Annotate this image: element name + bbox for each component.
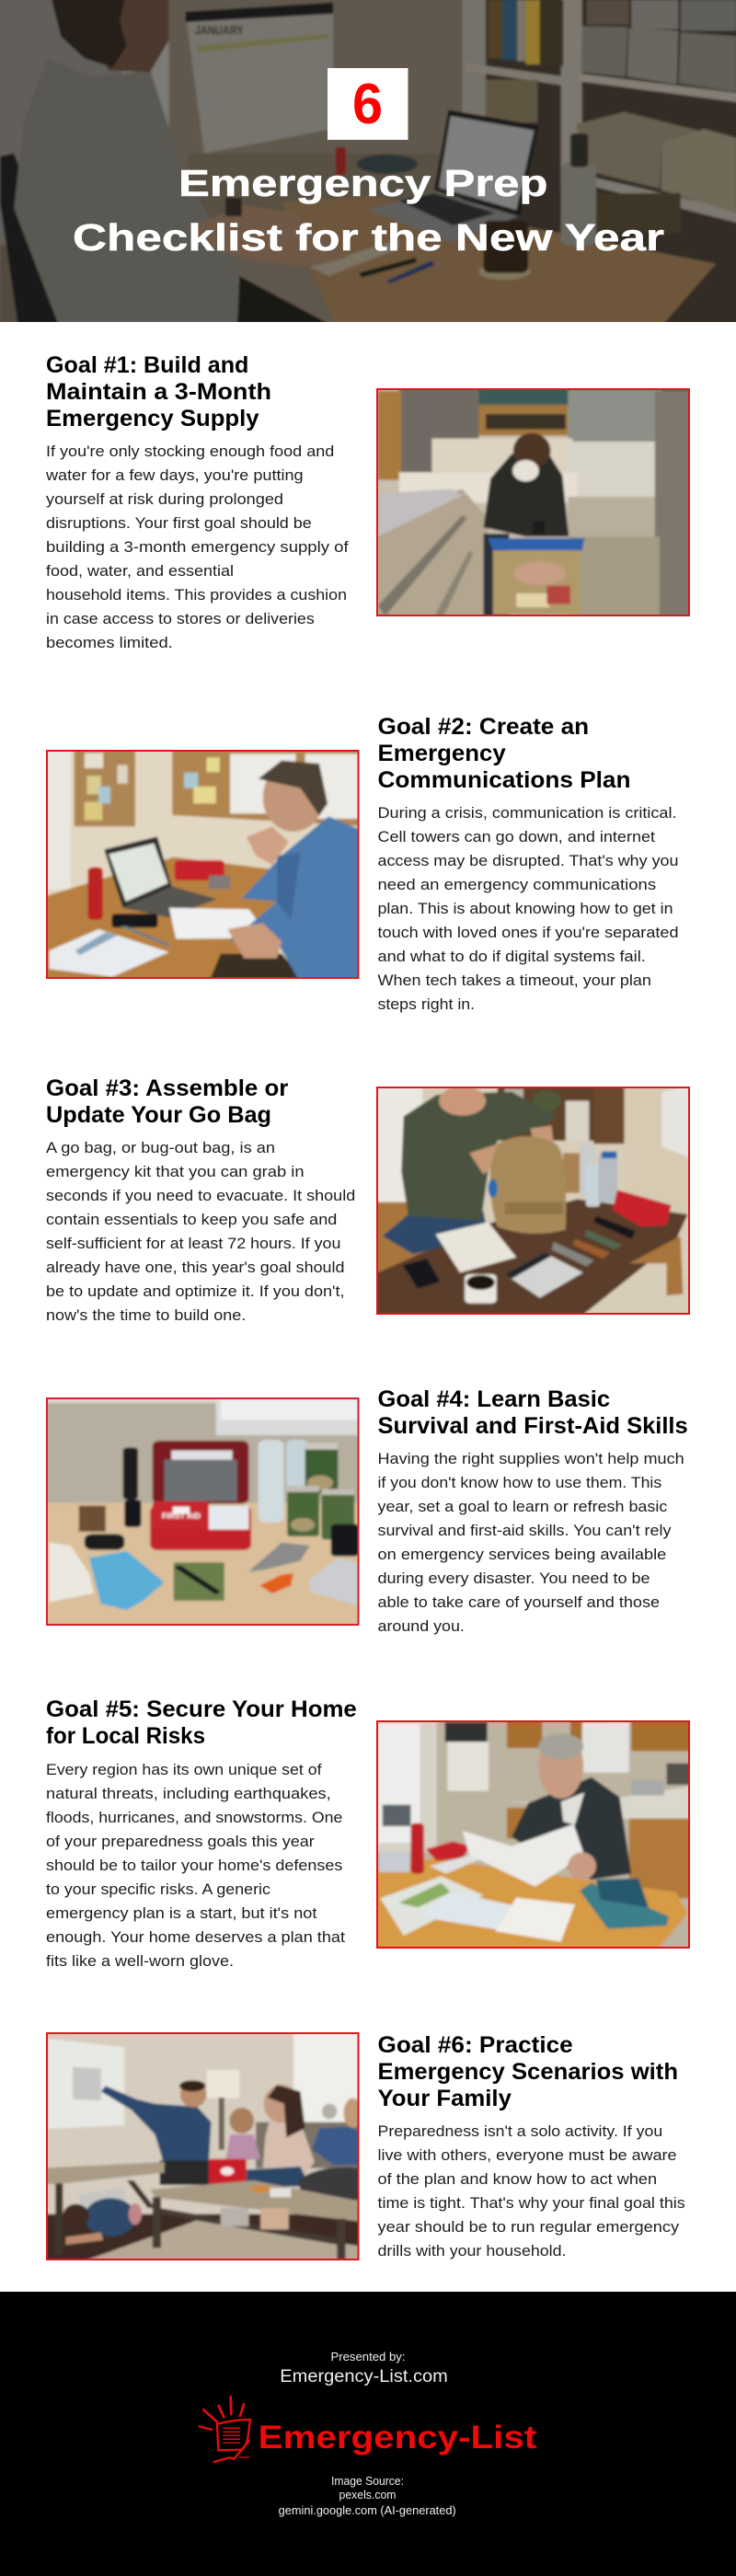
man <box>101 2086 212 2165</box>
backpack <box>490 1136 566 1234</box>
heading: goal 2: Emergency <box>377 741 506 766</box>
body text: goal 5: Every region has its own unique set of <box>46 1761 322 1778</box>
body text: goal 2: steps right in. <box>377 995 475 1013</box>
title: Emergency Prep <box>178 162 548 204</box>
body text: goal 3: A go bag, or bug-out bag, is an <box>46 1139 275 1156</box>
body text: goal 5: to your specific risks. A generic <box>46 1880 270 1898</box>
body text: goal 2 <box>377 804 679 1013</box>
body text: goal 6: Preparedness isn't a solo activity. If you <box>377 2122 662 2140</box>
panel: goal 6 <box>33 2024 685 2270</box>
title: Checklist for the New Year <box>73 216 664 259</box>
man <box>0 153 59 322</box>
heading: goal 1: Maintain a 3-Month <box>46 379 271 405</box>
heading: goal 5: for Local Risks <box>46 1723 205 1749</box>
number badge: 6 <box>352 73 383 136</box>
body text: goal 6: of the plan and know how to act when <box>377 2170 657 2188</box>
body text: goal 3: contain essentials to keep you safe and <box>46 1211 337 1228</box>
heading: goal 2: Communications Plan <box>377 767 631 793</box>
ration cans <box>305 1443 338 1493</box>
logo: Emergency-List <box>200 2397 537 2462</box>
body text: goal 6: drills with your household. <box>377 2242 567 2260</box>
flashlight and kit <box>410 1823 424 1874</box>
body text: goal 2: need an emergency communications <box>377 876 656 893</box>
photo: man shopping with a cart <box>376 388 690 616</box>
body text: goal 5: enough. Your home deserves a plan that <box>46 1928 345 1946</box>
heading: goal 5 <box>46 1696 357 1749</box>
body text: goal 1: in case access to stores or deliveries <box>46 610 315 627</box>
table <box>375 1858 687 1950</box>
image source credits: pexels.com <box>339 2489 396 2501</box>
left table <box>42 2162 165 2184</box>
heading: goal 3: Goal #3: Assemble or <box>46 1075 289 1101</box>
laptop <box>104 836 172 908</box>
desk <box>48 856 278 977</box>
heading: goal 1: Emergency Supply <box>46 406 259 431</box>
panel: goal 3 <box>46 1075 704 1324</box>
flashlight and food bars <box>593 1216 636 1239</box>
body text: goal 4: Having the right supplies won't help much <box>377 1450 684 1467</box>
photo: emergency kit items on a table <box>46 1397 359 1626</box>
header banner <box>0 0 736 331</box>
body text: goal 1: becomes limited. <box>46 634 173 651</box>
heading: goal 2: Goal #2: Create an <box>377 714 589 740</box>
body text: goal 5: natural threats, including earthquakes, <box>46 1785 331 1802</box>
heading: goal 4: Goal #4: Learn Basic <box>377 1386 610 1412</box>
heading: goal 2 <box>377 714 631 793</box>
body text: goal 3: seconds if you need to evacuate. It should <box>46 1187 355 1204</box>
body text: goal 4: around you. <box>377 1617 465 1635</box>
header photo: man planning at desk, darkened <box>0 0 736 331</box>
body text: goal 4: year, set a goal to learn or refresh basic <box>377 1498 668 1515</box>
photo: man reading a home emergency plan binder <box>366 1714 704 1957</box>
shelves <box>463 0 736 331</box>
floor and rug <box>33 2214 371 2270</box>
map and papers <box>380 1876 484 1936</box>
body text: goal 4: survival and first-aid skills. You can't rely <box>377 1522 672 1539</box>
man <box>484 451 569 536</box>
kit <box>153 1441 248 1503</box>
desk <box>282 196 716 331</box>
body text: goal 1: building a 3-month emergency supply of <box>46 538 349 556</box>
number badge <box>328 68 408 140</box>
presented by: Emergency-List.com <box>280 2367 448 2386</box>
body text: goal 1 <box>45 443 349 651</box>
image source credits: gemini.google.com (AI-generated) <box>279 2504 456 2517</box>
body text: goal 5: of your preparedness goals this year <box>46 1833 315 1850</box>
man <box>512 1777 631 1880</box>
presented by: Presented by: <box>331 2351 405 2363</box>
image source credits: Image Source: <box>331 2475 404 2488</box>
heading: goal 6: Your Family <box>377 2086 512 2111</box>
body text: goal 2: Cell towers can go down, and internet <box>377 828 655 845</box>
heading: goal 4: Survival and First-Aid Skills <box>377 1413 688 1439</box>
panel: goal 5 <box>46 1696 704 1970</box>
heading: goal 6 <box>377 2032 678 2111</box>
cart <box>489 538 584 550</box>
body text: goal 3: already have one, this year's goal should <box>46 1259 345 1276</box>
heading: goal 3 <box>46 1075 289 1128</box>
kid under the table <box>77 2187 127 2217</box>
body text: goal 3: now's the time to build one. <box>46 1306 246 1324</box>
clipboard, phone, mug, pouch <box>435 1222 516 1272</box>
photo: man packing a go bag <box>376 1087 690 1315</box>
body text: goal 6 <box>377 2122 685 2260</box>
books <box>580 1883 669 1929</box>
presented by <box>280 2351 448 2386</box>
first aid kit <box>175 860 224 880</box>
body text: goal 2: plan. This is about knowing how to get in <box>377 900 673 917</box>
bottle <box>561 163 596 246</box>
boy <box>312 2127 369 2165</box>
body text: goal 1: food, water, and essential <box>46 562 234 580</box>
notebook, tool, whistle, blankets <box>174 1562 224 1601</box>
woman <box>263 2119 315 2174</box>
body text: goal 1: disruptions. Your first goal should be <box>46 514 312 532</box>
body text: goal 2: touch with loved ones if you're separated <box>377 924 679 941</box>
body text: goal 5 <box>46 1761 345 1970</box>
image source credits <box>279 2475 456 2517</box>
heading: goal 1 <box>46 352 271 431</box>
body text: goal 2: and what to do if digital systems fail. <box>377 948 646 965</box>
body text: goal 2: When tech takes a timeout, your plan <box>377 972 651 989</box>
body text: goal 2: During a crisis, communication is critical. <box>377 804 677 822</box>
footer <box>0 2292 736 2576</box>
body text: goal 5: should be to tailor your home's defenses <box>46 1857 342 1874</box>
heading: goal 1: Goal #1: Build and <box>46 352 248 378</box>
heading: goal 4 <box>377 1386 688 1439</box>
title <box>73 162 664 259</box>
body text: goal 4: if you don't know how to use them. This <box>377 1474 661 1491</box>
binder <box>463 1824 584 1887</box>
body text: goal 4 <box>377 1450 684 1635</box>
body text: goal 3 <box>46 1139 355 1324</box>
body text: goal 1: water for a few days, you're putting <box>45 466 304 484</box>
body text: goal 3: emergency kit that you can grab in <box>46 1163 305 1180</box>
header photo: man planning at desk, darkened: JANUARY <box>195 23 244 37</box>
body text: goal 6: year should be to run regular emergency <box>377 2218 680 2236</box>
photo: emergency kit items on a table: FIRST AID <box>162 1512 201 1521</box>
laptop <box>434 109 538 216</box>
body text: goal 5: fits like a well-worn glove. <box>46 1952 234 1970</box>
table <box>371 1199 687 1316</box>
icon: checklist with rays <box>200 2397 250 2462</box>
bottles <box>580 1144 594 1196</box>
body text: goal 4: on emergency services being available <box>377 1546 666 1563</box>
calendar <box>186 3 333 154</box>
photo: man at desk with laptop <box>46 750 359 979</box>
body text: goal 3: self-sufficient for at least 72 hours. If you <box>46 1235 340 1252</box>
panel: goal 2 <box>33 714 679 1013</box>
panel: goal 4 <box>33 1386 688 1635</box>
first aid kit <box>613 1190 672 1226</box>
pens <box>359 258 417 278</box>
heading: goal 5: Goal #5: Secure Your Home <box>46 1696 357 1722</box>
panel: goal 1 <box>45 352 704 651</box>
first aid kit and red flashlight <box>336 147 346 175</box>
photo: family practising an emergency drill <box>33 2024 371 2270</box>
logo: Emergency-List: Emergency-List <box>259 2420 537 2455</box>
first aid kit <box>209 2159 247 2187</box>
body text: goal 5: floods, hurricanes, and snowstorms. One <box>46 1809 342 1826</box>
body text: goal 1: household items. This provides a cushion <box>46 586 347 604</box>
body text: goal 4: able to take care of yourself and those <box>377 1593 660 1611</box>
body text: goal 1: yourself at risk during prolonged <box>46 490 283 508</box>
flashlight and batteries <box>123 1447 138 1500</box>
heading: goal 3: Update Your Go Bag <box>46 1102 271 1128</box>
body text: goal 1: If you're only stocking enough food and <box>46 443 334 460</box>
mug and coaster <box>478 267 532 281</box>
man <box>210 952 300 977</box>
front table <box>150 2180 371 2222</box>
body text: goal 2: access may be disrupted. That's why you <box>377 852 679 869</box>
body text: goal 6: time is tight. That's why your final goal this <box>377 2194 685 2212</box>
body text: goal 6: live with others, everyone must be aware <box>377 2146 677 2164</box>
body text: goal 5: emergency plan is a start, but it's not <box>46 1904 317 1922</box>
girl <box>225 2134 260 2162</box>
papers, phone, notepad <box>50 929 169 977</box>
body text: goal 4: during every disaster. You need to be <box>377 1570 650 1587</box>
water bottles <box>259 1440 284 1523</box>
heading: goal 6: Emergency Scenarios with <box>377 2059 678 2085</box>
straps, mask, gloves <box>85 1534 124 1550</box>
backpack <box>298 2168 362 2201</box>
body text: goal 3: be to update and optimize it. If you don't, <box>46 1282 344 1300</box>
man <box>383 1212 489 1254</box>
flashlight <box>87 868 103 920</box>
heading: goal 6: Goal #6: Practice <box>377 2032 573 2058</box>
